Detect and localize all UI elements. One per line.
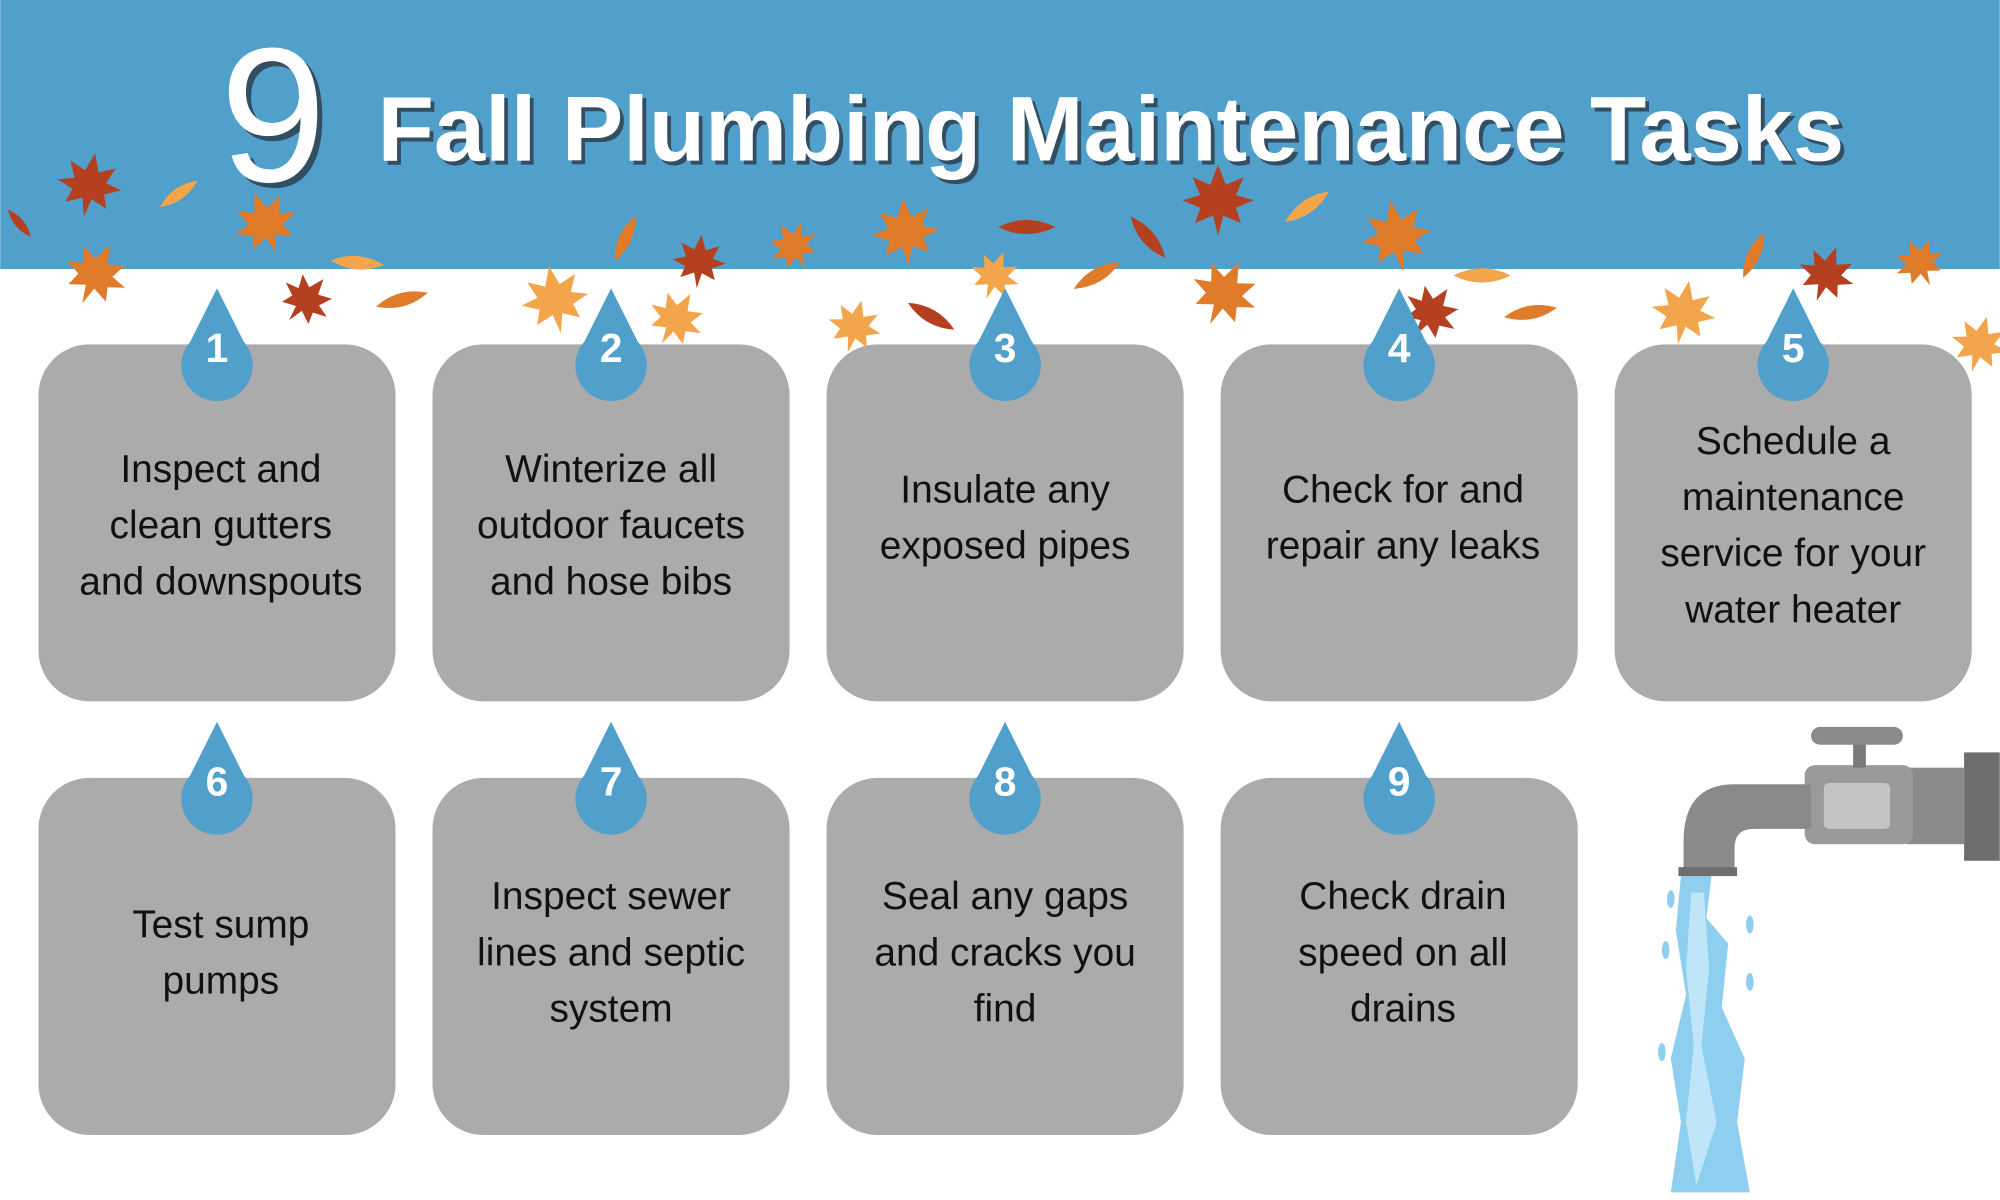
card 4 xyxy=(1221,344,1578,701)
card 4: repair any leaks xyxy=(1266,525,1540,568)
badge numbers: 9 xyxy=(1388,759,1411,805)
title: 9 xyxy=(225,13,331,227)
card 6: Test sump xyxy=(132,903,309,946)
card 7: system xyxy=(549,987,673,1030)
badge numbers xyxy=(206,325,1805,805)
badge numbers: 4 xyxy=(1388,325,1411,371)
header band xyxy=(0,0,2000,269)
card 5: service for your xyxy=(1660,532,1926,575)
badge numbers: 2 xyxy=(600,325,622,371)
title: Fall Plumbing Maintenance Tasks xyxy=(378,79,1844,181)
badge numbers: 6 xyxy=(206,759,228,805)
card 6 xyxy=(38,778,396,1135)
card 9 xyxy=(1221,778,1578,1135)
card 7 xyxy=(433,778,790,1135)
badge numbers: 1 xyxy=(206,325,228,371)
card 2: and hose bibs xyxy=(490,560,732,603)
falling leaves xyxy=(4,148,2000,379)
card 8: and cracks you xyxy=(874,931,1136,974)
card 5 xyxy=(1615,344,1972,701)
card 4: Check for and xyxy=(1282,468,1524,511)
badge numbers: 3 xyxy=(994,325,1016,371)
badge numbers: 7 xyxy=(600,759,622,805)
card 9: Check drain xyxy=(1299,875,1507,918)
card 2: outdoor faucets xyxy=(477,504,745,547)
card 9: speed on all xyxy=(1298,931,1508,974)
card 5: maintenance xyxy=(1682,476,1905,519)
title xyxy=(220,8,1848,227)
card 2: Winterize all xyxy=(505,448,717,491)
badge numbers: 5 xyxy=(1782,325,1805,371)
card 1: clean gutters xyxy=(110,504,332,547)
card 1 xyxy=(38,344,396,701)
card 3: Insulate any xyxy=(900,468,1110,511)
card 7: lines and septic xyxy=(477,931,745,974)
drop badges xyxy=(181,288,1829,835)
card 8: Seal any gaps xyxy=(882,875,1128,918)
title: 9 xyxy=(220,8,326,222)
badge numbers: 8 xyxy=(994,759,1016,805)
card 2 xyxy=(433,344,790,701)
card 3 xyxy=(827,344,1184,701)
card 6: pumps xyxy=(162,959,279,1002)
card 7: Inspect sewer xyxy=(491,875,731,918)
card 8 xyxy=(827,778,1184,1135)
card 1: Inspect and xyxy=(120,448,321,491)
card 8: find xyxy=(974,987,1036,1030)
title: Fall Plumbing Maintenance Tasks xyxy=(382,83,1848,185)
card 1: and downspouts xyxy=(79,560,362,603)
card 3: exposed pipes xyxy=(880,525,1130,568)
icon: faucet with water xyxy=(1658,727,2000,1192)
card 5: Schedule a xyxy=(1696,420,1891,463)
card 5: water heater xyxy=(1684,588,1901,631)
card 9: drains xyxy=(1350,987,1456,1030)
